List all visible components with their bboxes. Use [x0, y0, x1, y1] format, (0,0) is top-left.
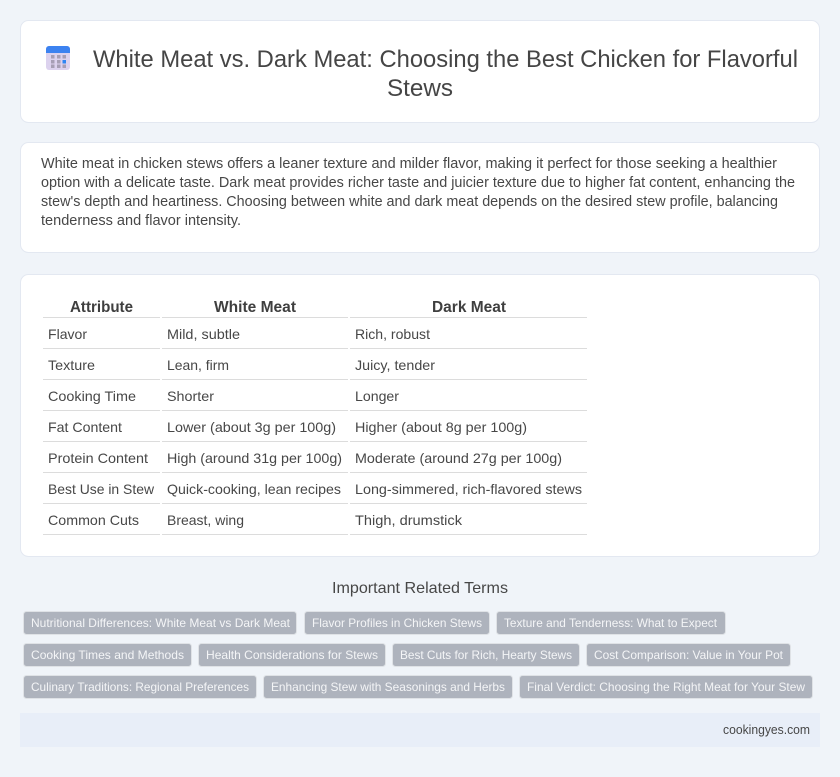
row: protein content: Protein Content: [48, 450, 148, 466]
tag: [586, 644, 790, 666]
row: protein content: High (around 31g per 100g): [167, 450, 342, 466]
text block: introduction: [41, 156, 795, 229]
table rules: [43, 317, 587, 535]
icon: calendar: [46, 46, 70, 70]
tag: [264, 676, 512, 698]
panel: introduction: [20, 142, 820, 252]
tag: [198, 644, 386, 666]
row: best use in stew: Best Use in Stew: [48, 481, 155, 497]
table header row: White Meat: [214, 299, 296, 316]
table header row: Attribute: [70, 299, 133, 316]
row: fat content: Lower (about 3g per 100g): [167, 419, 336, 435]
row: texture: Texture: [48, 357, 95, 373]
row: flavor: Rich, robust: [355, 326, 430, 342]
row: texture: Lean, firm: [167, 357, 229, 373]
row: flavor: Flavor: [48, 326, 87, 342]
tag: [496, 612, 726, 634]
tag: Texture and Tenderness: What to Expect: [504, 616, 718, 630]
title: White Meat vs. Dark Meat: Choosing the Best Chicken for Flavorful: [93, 46, 798, 73]
title: Stews: [387, 75, 453, 102]
tags: related terms: [24, 612, 812, 698]
tag: Enhancing Stew with Seasonings and Herbs: [271, 680, 505, 694]
row: flavor: Mild, subtle: [167, 326, 240, 342]
row: best use in stew: Long-simmered, rich-flavored stews: [355, 481, 582, 497]
row: cooking time: Cooking Time: [48, 388, 136, 404]
row: protein content: [48, 450, 562, 466]
row: fat content: [48, 419, 527, 435]
text block: introduction: tenderness and flavor intensity.: [41, 213, 241, 229]
row: fat content: Fat Content: [48, 419, 122, 435]
row: cooking time: Shorter: [167, 388, 214, 404]
tag: Cost Comparison: Value in Your Pot: [594, 648, 784, 662]
tag: Best Cuts for Rich, Hearty Stews: [400, 648, 572, 662]
table header row: Dark Meat: [432, 299, 506, 316]
text block: introduction: stew's depth and heartiness. Choosing between white and dark meat depends on the desired stew profile, balancing: [41, 194, 778, 210]
title: [93, 46, 798, 102]
text block: introduction: White meat in chicken stews offers a leaner texture and milder flavor, making it perfect for those seeking a healthier: [41, 156, 777, 172]
tag: Flavor Profiles in Chicken Stews: [312, 616, 482, 630]
row: common cuts: Thigh, drumstick: [355, 512, 463, 528]
tag: [24, 644, 192, 666]
row: best use in stew: [48, 481, 582, 497]
row: texture: [48, 357, 435, 373]
row: texture: Juicy, tender: [355, 357, 435, 373]
row: cooking time: [48, 388, 399, 404]
tag: Cooking Times and Methods: [31, 648, 184, 662]
row: flavor: [48, 326, 430, 342]
row: common cuts: Breast, wing: [167, 512, 244, 528]
tag: Health Considerations for Stews: [206, 648, 378, 662]
footer: cookingyes.com: [723, 723, 810, 737]
row: fat content: Higher (about 8g per 100g): [355, 419, 527, 435]
tag: [520, 676, 812, 698]
row: common cuts: [48, 512, 463, 528]
row: common cuts: Common Cuts: [48, 512, 139, 528]
tag: [304, 612, 490, 634]
tag: [24, 676, 256, 698]
footer: [20, 713, 820, 747]
tag: [392, 644, 580, 666]
row: best use in stew: Quick-cooking, lean recipes: [167, 481, 341, 497]
tag: [24, 612, 296, 634]
row: protein content: Moderate (around 27g per 100g): [355, 450, 562, 466]
tag: Final Verdict: Choosing the Right Meat for Your Stew: [527, 680, 805, 694]
heading: related terms: Important Related Terms: [332, 580, 508, 597]
panel: comparison table: [20, 274, 820, 556]
tag: Nutritional Differences: White Meat vs Dark Meat: [31, 616, 291, 630]
panel: header: [20, 20, 820, 122]
text block: introduction: option with a delicate taste. Dark meat provides richer taste and juicier texture due to higher fat content, enhancing the: [41, 175, 795, 191]
row: cooking time: Longer: [355, 388, 399, 404]
tag: Culinary Traditions: Regional Preferences: [31, 680, 249, 694]
table header row: [70, 299, 506, 316]
